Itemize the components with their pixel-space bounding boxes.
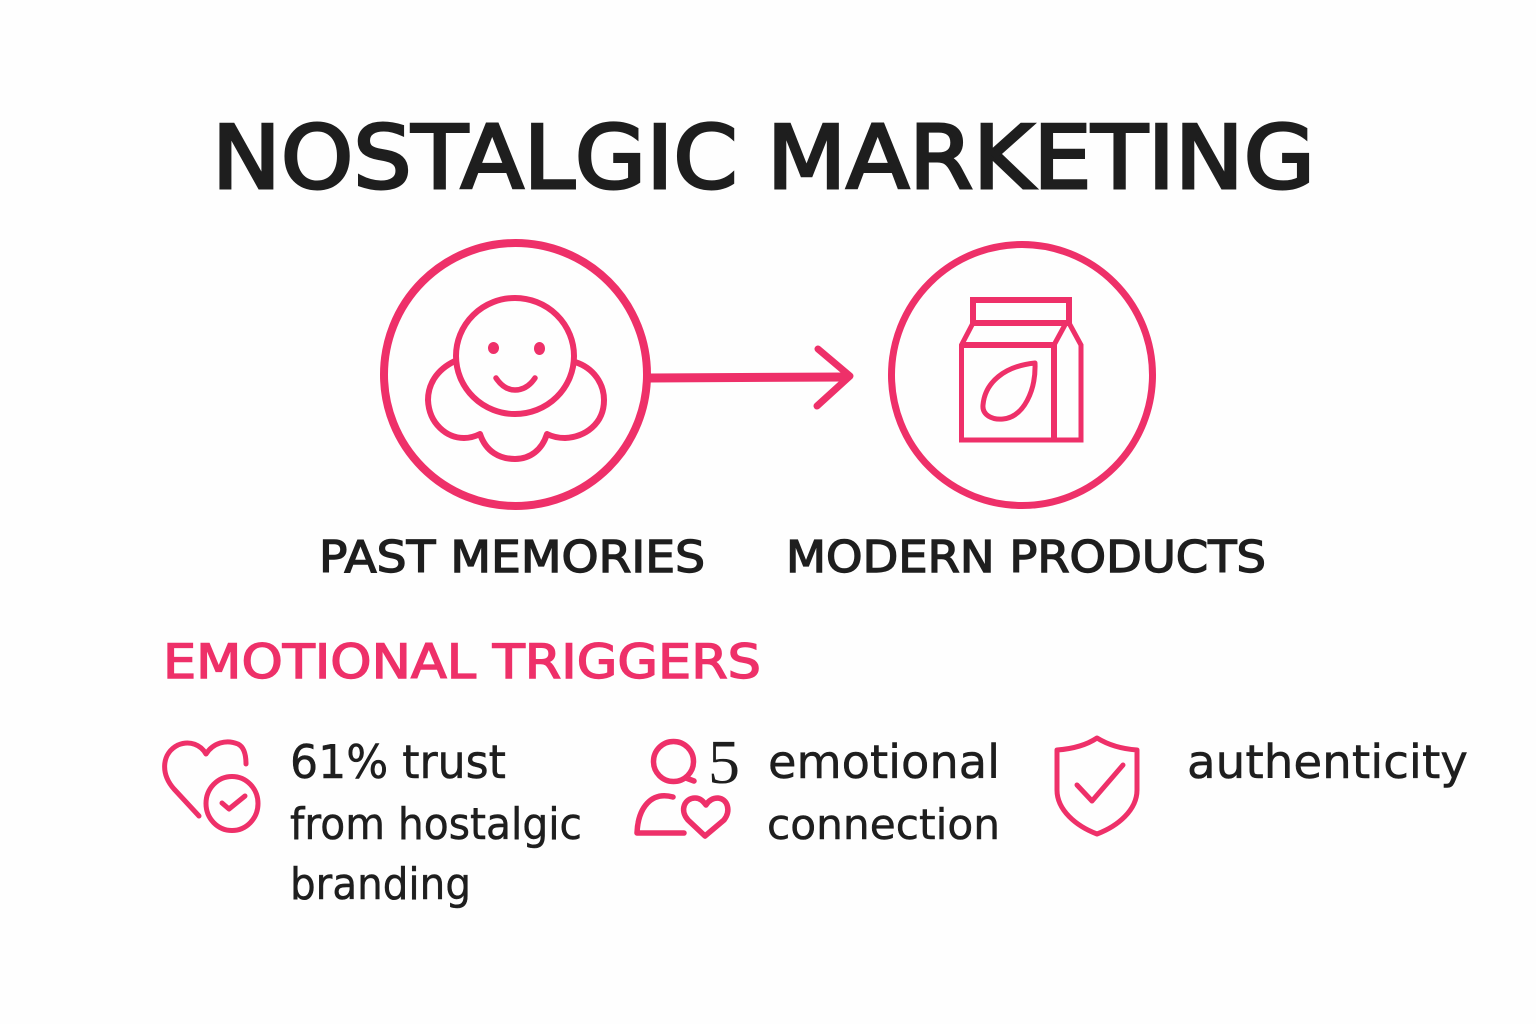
number 5: 5 bbox=[708, 729, 740, 797]
icon: heart with check bbox=[165, 742, 258, 830]
text: emotional connection bbox=[767, 735, 1000, 849]
icon: modern products circle with milk carton bbox=[892, 244, 1152, 506]
text: 61% trust from nostalgic branding: from hostalgic bbox=[290, 799, 582, 850]
label: modern products: MODERN PRODUCTS bbox=[786, 532, 1266, 583]
heading: emotional triggers: EMOTIONAL TRIGGERS bbox=[163, 635, 761, 690]
text: emotional connection: connection bbox=[767, 800, 1000, 849]
text: 61% trust from nostalgic branding: branding bbox=[290, 859, 471, 910]
icon: person with heart bbox=[637, 742, 728, 836]
title: NOSTALGIC MARKETING bbox=[212, 107, 1315, 209]
arrow: past to modern bbox=[650, 349, 850, 406]
text: 61% trust from nostalgic branding bbox=[290, 735, 582, 910]
icon: past memories circle with smiling face bbox=[384, 243, 647, 506]
text: emotional connection: emotional bbox=[768, 735, 1000, 789]
text: 61% trust from nostalgic branding: 61% trust bbox=[290, 735, 506, 789]
label: past memories: PAST MEMORIES bbox=[319, 532, 705, 583]
icon: shield with check bbox=[1057, 738, 1137, 834]
text: authenticity: authenticity bbox=[1187, 735, 1468, 789]
